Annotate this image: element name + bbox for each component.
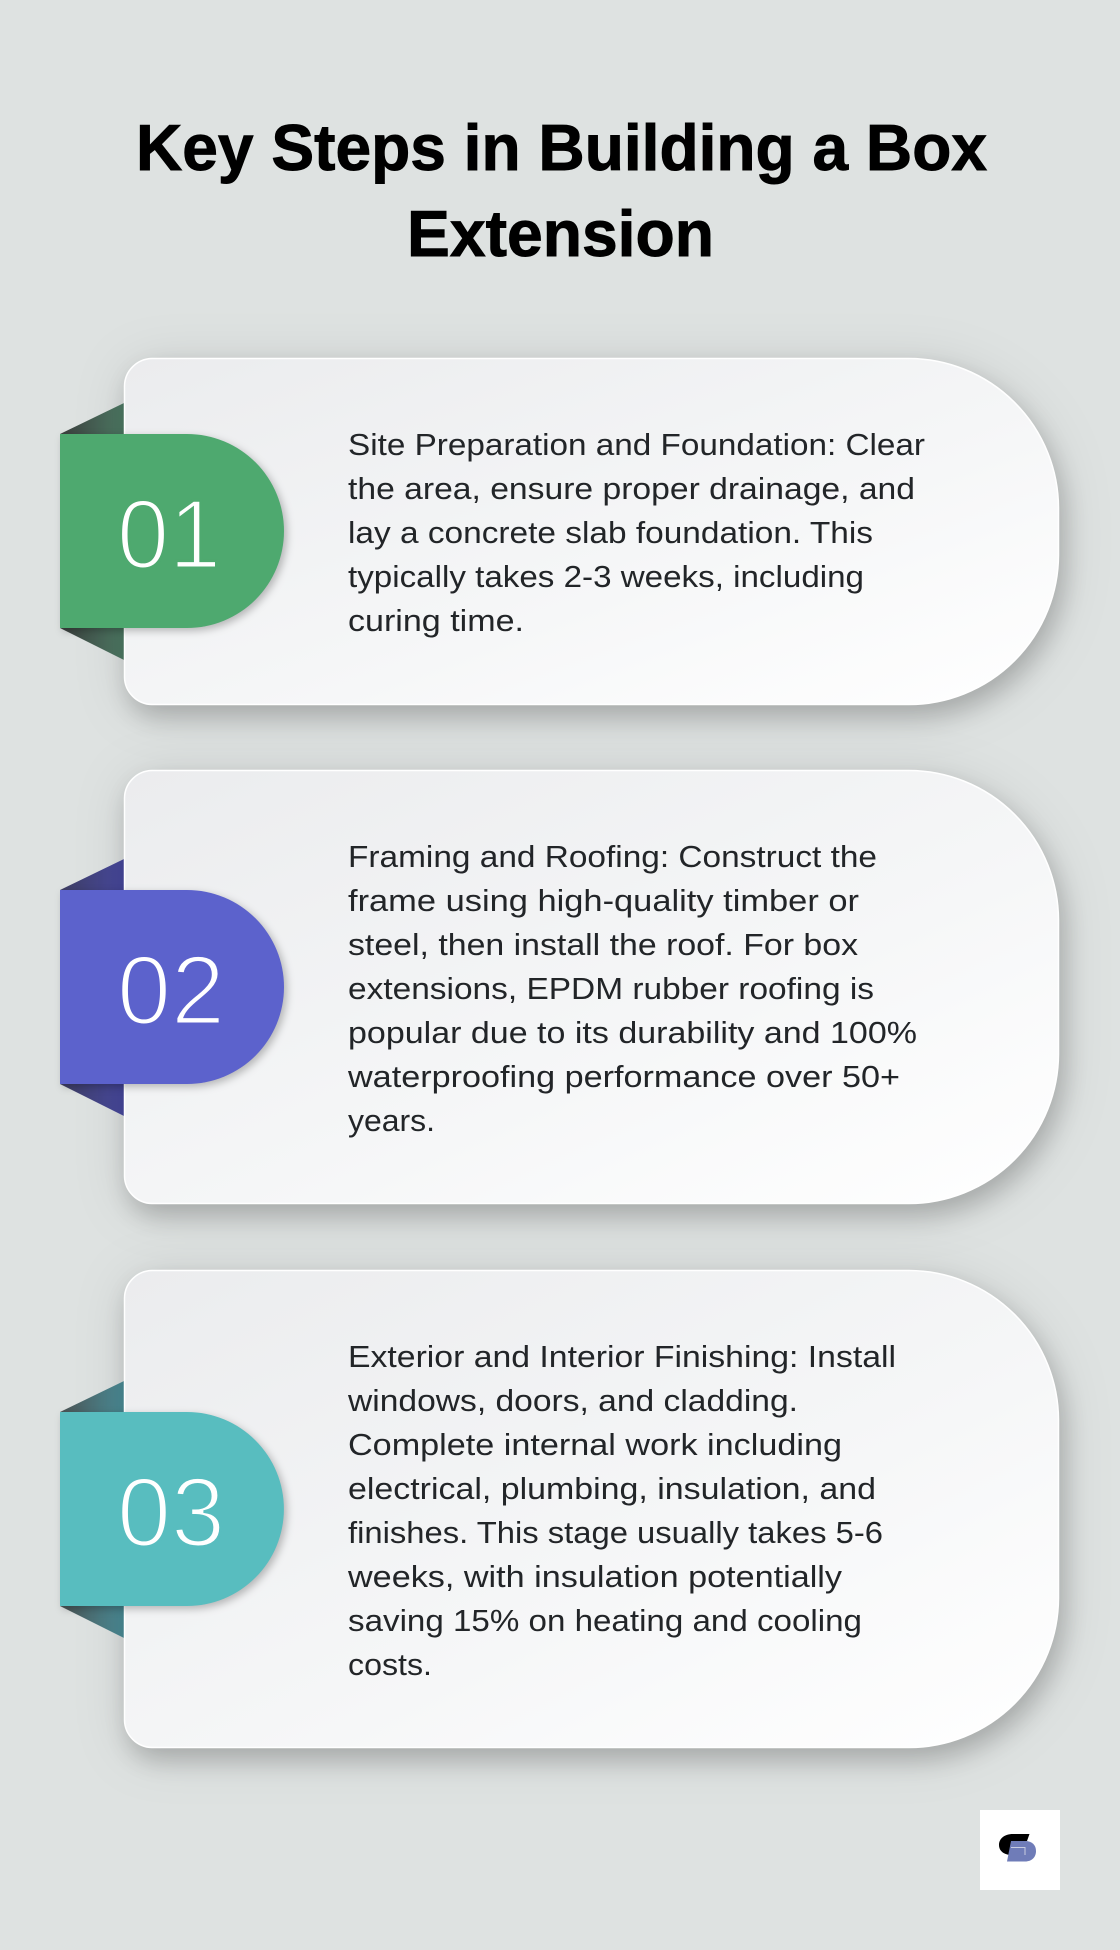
text: step 2 description: steel, then install the roof. For box xyxy=(348,927,859,962)
panel: step 2 framing and roofing xyxy=(60,770,1058,1204)
text: step 2 description xyxy=(347,839,917,1138)
text: step 3 description: weeks, with insulation potentially xyxy=(347,1559,843,1594)
text: step 1 description: lay a concrete slab foundation. This xyxy=(348,515,873,550)
panel: step 1 site preparation xyxy=(60,358,1058,704)
text: step 2 description: extensions, EPDM rubber roofing is xyxy=(348,971,874,1006)
panel: step 3 exterior and interior finishing xyxy=(60,1270,1058,1748)
text: step 3 description: costs. xyxy=(348,1647,432,1682)
badge: 03 xyxy=(60,1412,284,1606)
text: step 2 description: frame using high-quality timber or xyxy=(348,883,859,918)
text: step 3 description xyxy=(347,1339,896,1682)
logo xyxy=(980,1810,1060,1890)
ribbon fold: step 3 xyxy=(60,1381,124,1638)
text: step 1 description: curing time. xyxy=(348,603,524,638)
text: step 3 description: electrical, plumbing, insulation, and xyxy=(348,1471,876,1506)
text: step 3 description: Exterior and Interior Finishing: Install xyxy=(348,1339,896,1374)
card: step 2 xyxy=(124,770,1058,1204)
text: step 3 description: Complete internal work including xyxy=(348,1427,842,1462)
text: step 3 description: finishes. This stage usually takes 5-6 xyxy=(348,1515,883,1550)
ribbon fold: step 2 xyxy=(60,859,124,1116)
text: step 1 description: typically takes 2-3 weeks, including xyxy=(348,559,864,594)
card: step 1 xyxy=(124,358,1058,704)
badge: 02: 02 xyxy=(117,935,225,1045)
text: step 1 description: the area, ensure proper drainage, and xyxy=(348,471,915,506)
badge: 03: 03 xyxy=(117,1457,225,1567)
card: step 3 xyxy=(124,1270,1058,1748)
text: step 1 description xyxy=(348,427,925,638)
title xyxy=(136,111,987,270)
ribbon fold: step 1 xyxy=(60,403,124,660)
text: step 3 description: saving 15% on heating and cooling xyxy=(348,1603,862,1638)
title: Key Steps in Building a Box xyxy=(136,111,987,184)
text: step 2 description: popular due to its durability and 100% xyxy=(348,1015,917,1050)
text: step 2 description: Framing and Roofing: Construct the xyxy=(348,839,877,874)
text: step 2 description: years. xyxy=(348,1103,435,1138)
title: Extension xyxy=(407,197,714,270)
badge: 02 xyxy=(60,890,284,1084)
badge: 01: 01 xyxy=(117,479,221,589)
text: step 2 description: waterproofing performance over 50+ xyxy=(347,1059,900,1094)
text: step 3 description: windows, doors, and cladding. xyxy=(347,1383,798,1418)
badge: 01 xyxy=(60,434,284,628)
text: step 1 description: Site Preparation and Foundation: Clear xyxy=(348,427,925,462)
